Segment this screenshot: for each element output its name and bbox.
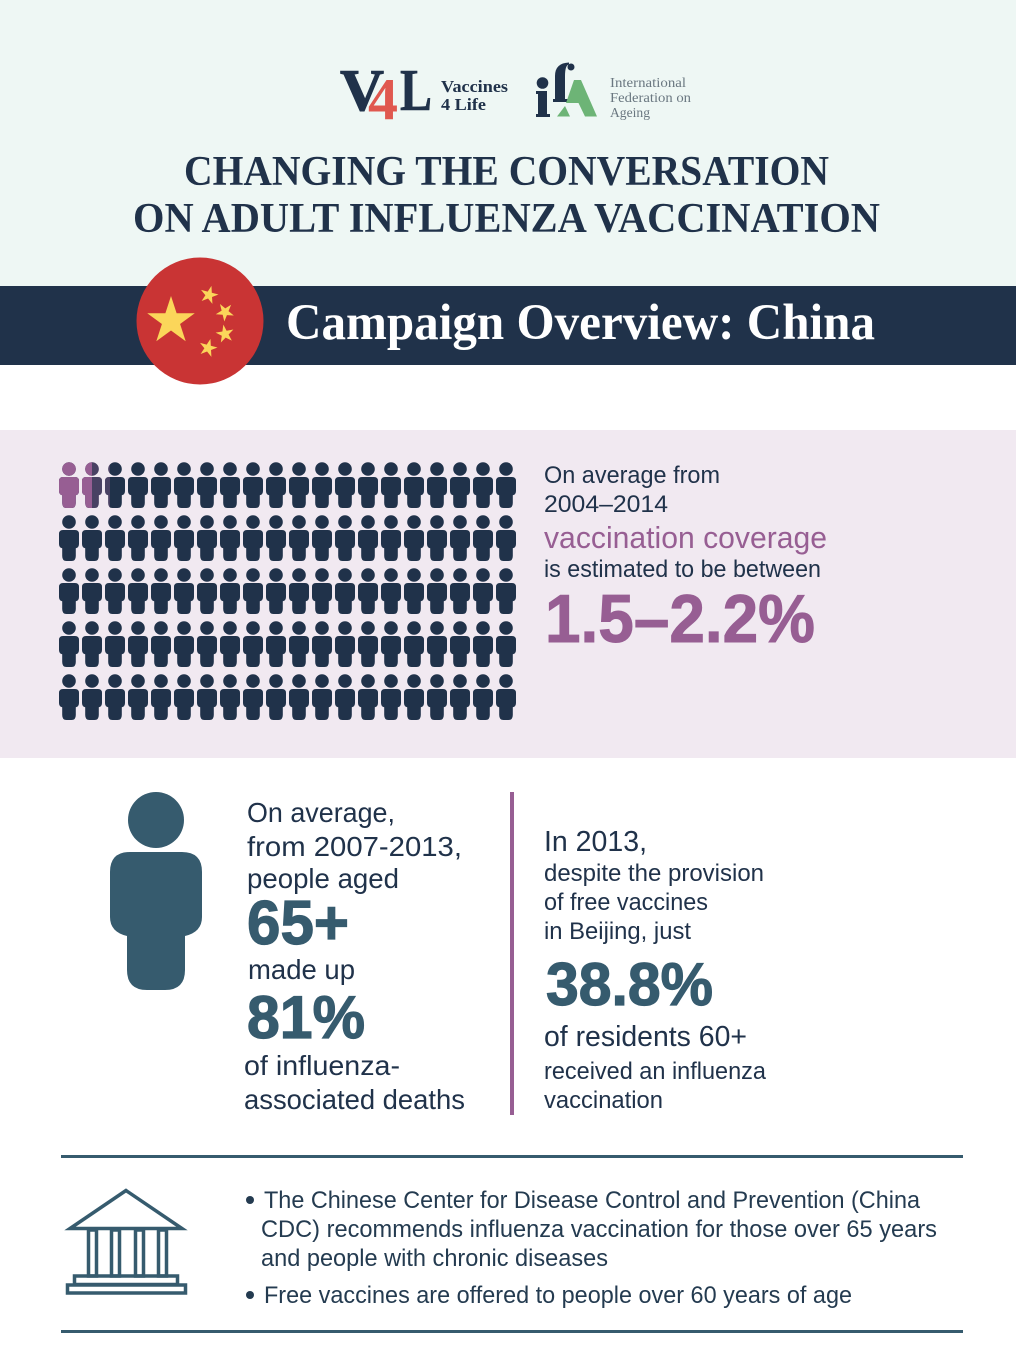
icon: China flag xyxy=(136,258,264,384)
coverage text: On average from xyxy=(544,462,720,489)
text block: Beijing statistic: of residents 60+ xyxy=(544,1021,747,1053)
panel: vaccination coverage xyxy=(0,430,1016,758)
bullet list: policy: Free vaccines are offered to people over 60 years of age xyxy=(264,1282,852,1309)
bullet list: policy: and people with chronic diseases xyxy=(261,1245,608,1272)
text block: Beijing statistic: 38.8% xyxy=(546,951,713,1018)
logo: International Federation on Ageing: International xyxy=(610,76,686,91)
text block: deaths statistic: of influenza- xyxy=(244,1050,400,1081)
text block: Beijing statistic xyxy=(544,826,767,1114)
title: CHANGING THE CONVERSATION xyxy=(184,149,829,195)
bullet list: policy xyxy=(246,1187,937,1309)
text block: Beijing statistic: vaccination xyxy=(544,1087,663,1114)
logo: Vaccines 4 Life: 4 Life xyxy=(441,95,486,114)
title: ON ADULT INFLUENZA VACCINATION xyxy=(133,196,880,242)
text block: Beijing statistic: of free vaccines xyxy=(544,889,708,916)
text block: deaths statistic: people aged xyxy=(247,863,399,894)
coverage text: vaccination coverage xyxy=(544,520,827,555)
logo: Vaccines 4 Life: Vaccines xyxy=(441,77,508,96)
logo: International Federation on Ageing: Federation on xyxy=(610,91,691,106)
bullet list: policy: The Chinese Center for Disease Control and Prevention (China xyxy=(264,1187,921,1214)
logo: International Federation on Ageing xyxy=(536,62,691,121)
text block: deaths statistic xyxy=(244,797,465,1115)
text block: deaths statistic: associated deaths xyxy=(244,1084,465,1115)
coverage text: is estimated to be between xyxy=(544,556,821,583)
text block: deaths statistic: 65+ xyxy=(247,889,349,958)
bullet list: policy: CDC) recommends influenza vaccination for those over 65 years xyxy=(261,1216,937,1243)
people grid xyxy=(59,462,516,720)
banner heading: Campaign Overview: China xyxy=(286,295,875,351)
text block: Beijing statistic: In 2013, xyxy=(544,826,647,858)
title xyxy=(133,149,880,242)
text block: deaths statistic: made up xyxy=(248,954,355,985)
logo: Vaccines 4 Life: L xyxy=(400,57,432,123)
text block: deaths statistic: from 2007-2013, xyxy=(247,831,462,862)
logo: Vaccines 4 Life xyxy=(340,57,508,132)
logo: Vaccines 4 Life: 4 xyxy=(368,66,398,132)
text block: Beijing statistic: in Beijing, just xyxy=(544,918,691,945)
icon: government building xyxy=(68,1190,186,1293)
text block: deaths statistic: 81% xyxy=(247,984,365,1051)
header background xyxy=(0,0,1016,290)
text block: Beijing statistic: despite the provision xyxy=(544,860,764,887)
logo: International Federation on Ageing: Ageing xyxy=(610,106,650,121)
coverage text xyxy=(544,462,827,657)
text block: deaths statistic: On average, xyxy=(247,797,395,828)
icon: person xyxy=(110,792,202,990)
banner xyxy=(0,286,1016,365)
logo: Vaccines 4 Life: V xyxy=(340,57,384,123)
coverage text: 2004–2014 xyxy=(544,491,668,518)
coverage text: 1.5–2.2% xyxy=(545,581,815,657)
text block: Beijing statistic: received an influenza xyxy=(544,1058,767,1085)
